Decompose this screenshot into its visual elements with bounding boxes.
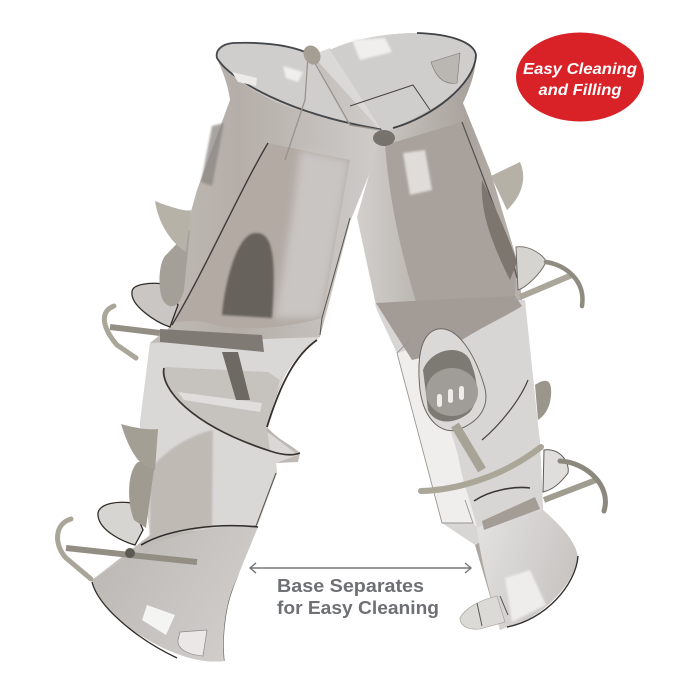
back panel lighter strip <box>275 150 350 318</box>
rim tab <box>431 53 460 83</box>
cutout light stripe <box>178 392 262 412</box>
base flare <box>92 526 258 662</box>
lower perch cutout <box>162 367 280 451</box>
perch port upper right <box>491 162 582 306</box>
dark band on base <box>482 497 540 530</box>
perch port lower left <box>58 424 197 579</box>
port disc <box>426 368 478 416</box>
bowl <box>543 450 568 492</box>
seam line right <box>320 218 350 335</box>
central front port <box>419 329 486 470</box>
right feeder tube <box>330 33 578 630</box>
left feeder tube <box>92 43 385 662</box>
front curved edge <box>482 380 528 440</box>
printed label <box>201 123 224 186</box>
callout badge <box>516 32 644 122</box>
caption line 2: for Easy Cleaning <box>277 597 439 618</box>
lower darker wedge <box>150 430 213 537</box>
perch rod <box>544 480 596 500</box>
foot tab <box>460 596 505 629</box>
perch port lower right <box>421 381 605 511</box>
arc edge <box>474 488 530 501</box>
rim highlight <box>352 38 392 60</box>
base highlight <box>505 570 546 622</box>
arrow head left <box>250 563 256 573</box>
lower light body <box>375 300 543 545</box>
base tab <box>178 630 207 656</box>
base top edge <box>141 526 258 545</box>
seam line base <box>223 473 276 661</box>
rear outlined panel <box>397 345 477 527</box>
caption line 1: Base Separates <box>277 575 424 596</box>
left tube body <box>92 43 385 662</box>
lower cutout edge <box>164 368 300 455</box>
tab inside left rim <box>232 72 257 86</box>
perch rod <box>520 275 572 297</box>
port interior <box>423 350 477 422</box>
baffle disc <box>129 462 155 528</box>
inner dark port silhouette <box>222 233 274 318</box>
baffle disc <box>159 230 190 306</box>
arrow line <box>251 567 470 569</box>
bracket <box>125 548 135 558</box>
slot right <box>459 386 464 400</box>
grey wing <box>121 424 158 470</box>
upper rim interior <box>330 33 476 133</box>
curved wire <box>560 461 605 511</box>
grey wing <box>535 381 551 420</box>
base curved edge <box>507 556 578 627</box>
curved wire <box>546 262 582 306</box>
slot left <box>437 394 442 407</box>
red oval <box>516 32 644 122</box>
perch stem <box>455 425 482 470</box>
rim overlap fill <box>312 48 388 133</box>
base highlight <box>142 605 175 635</box>
back outer tab outline <box>397 340 473 523</box>
curved wire <box>104 306 136 358</box>
callout text line 1: Easy Cleaning <box>523 61 638 78</box>
grey wing <box>491 162 523 210</box>
bowl <box>132 283 178 327</box>
arrow head right <box>465 563 471 573</box>
foot tick marks <box>477 596 508 626</box>
perch port upper left <box>104 201 264 358</box>
right inner seam <box>462 122 517 278</box>
back darker panel <box>385 122 516 330</box>
callout text line 2: and Filling <box>538 82 622 99</box>
curved wire <box>58 519 91 579</box>
rim highlight <box>283 66 303 82</box>
front knot <box>373 130 395 146</box>
top rim interior <box>216 43 350 125</box>
base caption <box>277 575 439 618</box>
base flare <box>477 510 578 630</box>
bowl <box>98 502 143 545</box>
top rim edge <box>217 43 385 130</box>
lower light section <box>140 337 320 535</box>
bracket <box>160 329 264 352</box>
front joint plate line <box>350 85 430 110</box>
double arrow <box>250 563 471 573</box>
rim dark edge <box>393 33 476 128</box>
right tube body <box>330 33 578 630</box>
perch rod <box>110 327 160 333</box>
scoop edge line <box>172 143 268 325</box>
inner scoop panel <box>175 143 350 328</box>
lower grey panel <box>376 296 522 360</box>
rear knot <box>300 42 324 68</box>
side edge dark <box>267 340 317 427</box>
top wire hanger <box>285 42 395 160</box>
port collar <box>419 329 486 431</box>
three slots <box>437 386 464 407</box>
base bottom edge <box>92 582 177 658</box>
slot middle <box>448 389 453 403</box>
perch wire front <box>421 447 541 491</box>
dark rear wall <box>482 180 517 280</box>
grey wing <box>155 201 191 252</box>
bowl <box>516 247 546 290</box>
perch rod <box>66 548 197 562</box>
wire strands <box>285 55 380 160</box>
lower dark stem <box>222 352 250 400</box>
panel highlight <box>403 150 432 195</box>
